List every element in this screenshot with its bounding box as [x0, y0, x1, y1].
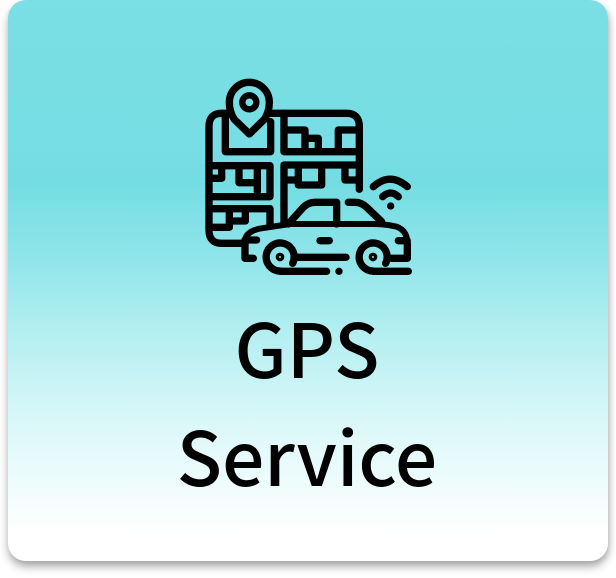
- icon: location pin: [229, 82, 269, 134]
- icon: wifi signal: [373, 179, 407, 210]
- icon: car: [245, 202, 408, 275]
- heading: GPS: GPS: [234, 293, 379, 400]
- icon: map: [209, 113, 359, 243]
- heading: Service: Service: [177, 401, 437, 508]
